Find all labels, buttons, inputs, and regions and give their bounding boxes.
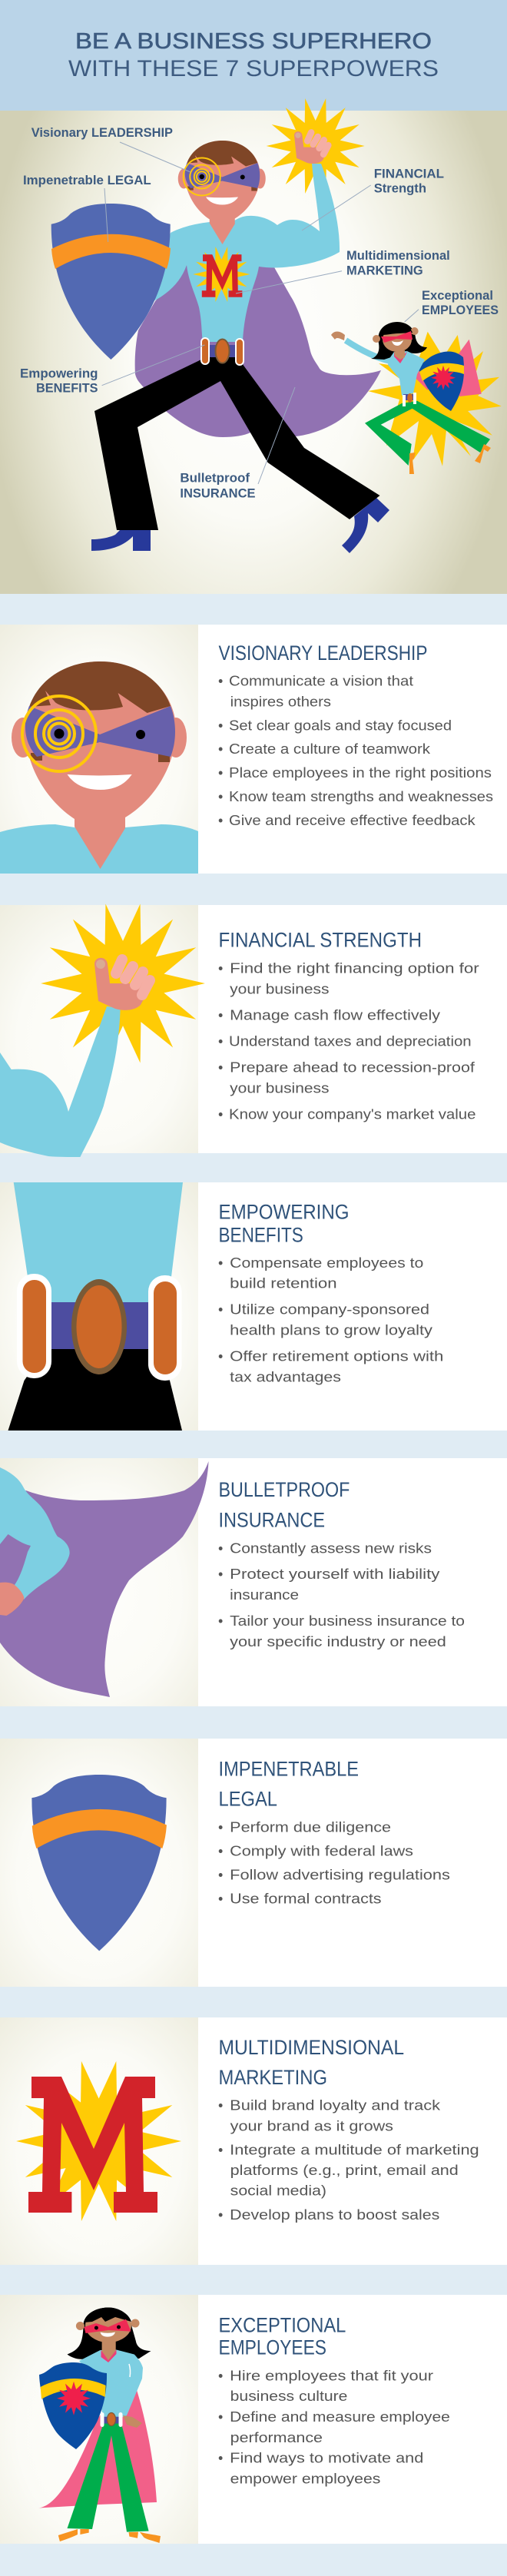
bullet list: Comply with federal laws	[230, 1843, 413, 1858]
title	[68, 29, 439, 81]
small employee hero	[331, 322, 502, 474]
bullet list: Compensate employees to	[230, 1255, 423, 1271]
bullet list: Find the right financing option for	[230, 961, 479, 976]
callout: bulletproof insurance	[180, 387, 295, 501]
superhero trousers	[94, 353, 379, 530]
hero illustration panel	[0, 98, 507, 594]
bullet list: Tailor your business insurance to	[230, 1613, 465, 1629]
bullet list: Define and measure employee	[230, 2409, 450, 2425]
bullet list: Protect yourself with liability	[230, 1566, 439, 1582]
bullet list: •	[218, 1007, 223, 1023]
callout: empowering benefits: BENEFITS	[36, 381, 98, 396]
heading: LEGAL	[218, 1788, 277, 1811]
heading	[218, 1478, 350, 1532]
panel: empowering benefits	[0, 1182, 507, 1431]
bullet list: •	[218, 2409, 223, 2425]
fist	[294, 131, 330, 164]
bullet list: •	[218, 673, 223, 688]
superhero cape	[135, 265, 381, 437]
bullet list: •	[218, 2142, 223, 2157]
bullet list	[218, 673, 493, 828]
bullet list: Prepare ahead to recession-proof	[230, 1060, 476, 1076]
utility belt	[201, 338, 244, 365]
bullet list: Find ways to motivate and	[230, 2451, 423, 2466]
callout: visionary leadership	[31, 125, 191, 172]
bullet list: •	[218, 2098, 223, 2114]
bullet list: Constantly assess new risks	[230, 1540, 432, 1556]
icon: starburst behind fist	[267, 98, 365, 194]
bullet list	[218, 1819, 450, 1906]
bullet list: inspires others	[230, 694, 331, 709]
heading	[218, 2036, 404, 2089]
superhero head with mask	[178, 141, 266, 244]
callout: multidimensional marketing	[236, 248, 450, 293]
callout: visionary leadership: Visionary LEADERSHIP	[31, 125, 173, 140]
callout: multidimensional marketing: Multidimensional	[346, 248, 450, 263]
callout: bulletproof insurance: INSURANCE	[180, 486, 255, 501]
bullet list: Understand taxes and depreciation	[229, 1034, 472, 1049]
callout: exceptional employees: Exceptional	[422, 288, 493, 303]
bullet list: •	[218, 718, 223, 733]
panel: financial strength	[0, 903, 507, 1157]
illustration: cape	[0, 1461, 209, 1697]
bullet list: Set clear goals and stay focused	[229, 718, 452, 733]
bullet list: performance	[230, 2430, 323, 2445]
bullet list: •	[218, 2368, 223, 2383]
bullet list: •	[218, 1613, 223, 1629]
bullet list: your business	[230, 1081, 329, 1096]
heading: INSURANCE	[218, 1509, 325, 1532]
bullet list: •	[218, 961, 223, 976]
bullet list: •	[218, 741, 223, 757]
bullet list	[218, 2368, 450, 2486]
title: BE A BUSINESS SUPERHERO	[75, 29, 432, 54]
callout: multidimensional marketing: MARKETING	[346, 264, 423, 278]
panel: impenetrable legal	[0, 1739, 507, 1987]
panel: bulletproof insurance	[0, 1458, 507, 1706]
bullet list	[218, 1540, 465, 1649]
bullet list: Perform due diligence	[230, 1819, 391, 1835]
bullet list: health plans to grow loyalty	[230, 1323, 432, 1338]
bullet list: Develop plans to boost sales	[230, 2207, 439, 2223]
bullet list: tax advantages	[230, 1370, 341, 1385]
bullet list: Manage cash flow effectively	[230, 1007, 440, 1023]
bullet list: Offer retirement options with	[230, 1349, 443, 1364]
icon: M chest emblem	[193, 247, 250, 302]
bullet list: social media)	[230, 2183, 326, 2199]
bullet list: •	[218, 1107, 223, 1122]
heading: MULTIDIMENSIONAL	[218, 2036, 404, 2059]
bullet list: Integrate a multitude of marketing	[230, 2142, 479, 2157]
bullet list: Use formal contracts	[230, 1891, 382, 1906]
bullet list: your brand as it grows	[230, 2118, 393, 2133]
bullet list: •	[218, 1566, 223, 1582]
bullet list: Follow advertising regulations	[230, 1867, 450, 1882]
callout: financial strength: Strength	[374, 181, 426, 196]
bullet list: platforms (e.g., print, email and	[230, 2163, 459, 2178]
heading: FINANCIAL STRENGTH	[218, 929, 422, 952]
bullet list: Know your company's market value	[229, 1107, 476, 1122]
bullet list: •	[218, 1302, 223, 1318]
heading: BULLETPROOF	[218, 1478, 350, 1501]
bullet list: •	[218, 789, 223, 804]
heading	[218, 1201, 349, 1247]
bullet list: •	[218, 1034, 223, 1049]
callout: impenetrable legal: Impenetrable LEGAL	[23, 173, 151, 187]
panel: multidimensional marketing	[0, 2017, 507, 2265]
callout: exceptional employees	[405, 288, 499, 322]
bullet list: Give and receive effective feedback	[229, 813, 476, 828]
bullet list: •	[218, 765, 223, 781]
illustration: utility belt	[8, 1182, 183, 1431]
superhero boots	[91, 498, 389, 553]
callout: financial strength: FINANCIAL	[374, 167, 444, 181]
callout: empowering benefits: Empowering	[20, 366, 98, 381]
bullet list: •	[218, 1060, 223, 1076]
bullet list: •	[218, 1843, 223, 1858]
callout: empowering benefits	[20, 345, 204, 396]
bullet list: Hire employees that fit your	[230, 2368, 433, 2383]
callout: bulletproof insurance: Bulletproof	[180, 471, 250, 486]
bullet list: Utilize company-sponsored	[230, 1302, 429, 1318]
callout: exceptional employees: EMPLOYEES	[422, 303, 499, 317]
bullet list: Create a culture of teamwork	[229, 741, 431, 757]
bullet list: your business	[230, 982, 329, 997]
illustration: raised fist with starburst	[0, 903, 205, 1157]
header band	[0, 0, 507, 111]
bullet list: •	[218, 1349, 223, 1364]
bullet list	[218, 2098, 479, 2223]
superhero shirt and arm	[154, 164, 340, 342]
panel: exceptional employees	[0, 2295, 507, 2544]
bullet list: •	[218, 1255, 223, 1271]
bullet list: insurance	[230, 1587, 299, 1603]
icon: shield	[51, 204, 171, 360]
illustration: employee superhero	[38, 2308, 161, 2543]
bullet list: Know team strengths and weaknesses	[229, 789, 493, 804]
heading: EMPLOYEES	[218, 2336, 326, 2359]
bullet list: •	[218, 1867, 223, 1882]
bullet list: build retention	[230, 1276, 337, 1291]
callout: financial strength	[302, 167, 444, 230]
bullet list: •	[218, 1819, 223, 1835]
bullet list	[218, 1255, 443, 1385]
bullet list: business culture	[230, 2389, 347, 2404]
heading: IMPENETRABLE	[218, 1758, 359, 1781]
bullet list: •	[218, 1891, 223, 1906]
heading: MARKETING	[218, 2066, 327, 2089]
heading	[218, 2314, 346, 2359]
heading: BENEFITS	[218, 1224, 303, 1247]
panel: visionary leadership	[0, 625, 507, 874]
illustration: masked face	[0, 661, 198, 874]
bullet list: •	[218, 2451, 223, 2466]
bullet list: Place employees in the right positions	[229, 765, 492, 781]
title: WITH THESE 7 SUPERPOWERS	[68, 56, 439, 81]
bullet list: your specific industry or need	[230, 1634, 446, 1649]
illustration: shield	[31, 1775, 167, 1951]
bullet list: Build brand loyalty and track	[230, 2098, 441, 2114]
heading: VISIONARY LEADERSHIP	[218, 642, 427, 665]
heading: EMPOWERING	[218, 1201, 349, 1224]
illustration: M with starburst	[16, 2061, 181, 2221]
bullet list: empower employees	[230, 2471, 380, 2486]
bullet list	[218, 961, 479, 1122]
bullet list: •	[218, 2207, 223, 2223]
heading	[218, 1758, 359, 1811]
bullet list: •	[218, 813, 223, 828]
heading: EXCEPTIONAL	[218, 2314, 346, 2337]
bullet list: Communicate a vision that	[229, 673, 413, 688]
bullet list: •	[218, 1540, 223, 1556]
callout: impenetrable legal	[23, 173, 151, 242]
